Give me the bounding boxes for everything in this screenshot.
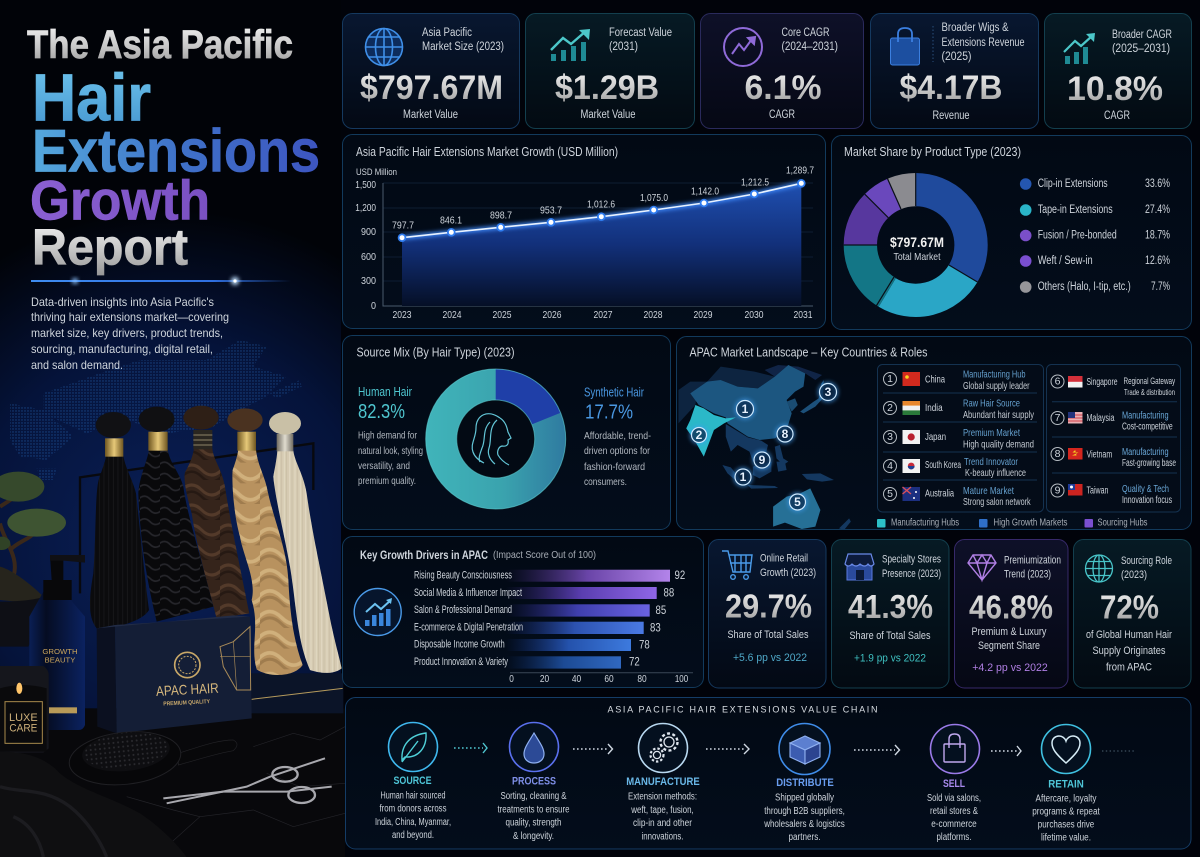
intro paragraph: market size, key drivers, product trends, (31, 326, 223, 340)
line area chart: 797.7 (392, 220, 414, 232)
step: manufacture: weft, tape, fusion, (630, 805, 694, 816)
panel: specialty stores presence: 41.3% (848, 588, 933, 625)
donut legend: Others (Halo, I-tip, etc.) (1038, 281, 1131, 293)
horizontal bar chart: Product Innovation & Variety (414, 656, 508, 668)
map legend: Sourcing Hubs (1098, 518, 1148, 528)
panel: value chain (346, 698, 1191, 849)
panel: KPI market size: $797.67M (360, 69, 503, 107)
human hair text (358, 385, 423, 487)
bottle: Growth Beauty (29, 555, 85, 730)
panel: sourcing role: from APAC (1106, 662, 1152, 674)
line area chart: 2028 (644, 309, 663, 321)
panel: KPI core CAGR: Core CAGR (782, 27, 830, 39)
country list right: 9 (1055, 484, 1061, 496)
icon: growth chart in ring (354, 588, 401, 636)
title (27, 23, 320, 276)
country list left: Australia (925, 488, 954, 500)
arrow: process to manufacture (573, 744, 612, 754)
horizontal bar chart: 88 (664, 588, 674, 600)
intro paragraph: thriving hair extensions market—covering (31, 310, 229, 324)
panel: specialty stores presence: Presence (2023) (882, 568, 941, 580)
intro paragraph: and salon demand. (31, 358, 123, 372)
step: sell: Sold via salons, (927, 793, 981, 804)
panel: sourcing role: (2023) (1121, 569, 1147, 581)
line area chart: 846.1 (440, 214, 462, 226)
panel: KPI broader CAGR: Broader CAGR (1112, 29, 1172, 41)
step: process: quality, strength (506, 818, 562, 828)
panel: left hero column (0, 0, 345, 857)
step: sell: SELL (943, 778, 965, 790)
candle: Luxe Care (0, 666, 49, 753)
country list left (878, 364, 1044, 512)
horizontal bar chart: 40 (572, 674, 582, 685)
step: sell: e-commerce (931, 819, 977, 830)
country list left: Mature Market (963, 485, 1014, 497)
product photo illustration (0, 340, 345, 857)
panel: KPI market size: Asia Pacific (422, 27, 472, 39)
panel: KPI broader revenue: Revenue (932, 110, 970, 122)
panel: sourcing role: Supply Originates (1092, 645, 1166, 657)
candle: Luxe Care: CARE (9, 723, 38, 735)
panel: premiumization trend: +4.2 pp vs 2022 (972, 662, 1048, 674)
title: Extensions (32, 118, 320, 184)
hair bundle: platinum straight (269, 412, 342, 673)
drivers heading: (Impact Score Out of 100) (493, 549, 596, 561)
panel: sourcing role: 72% (1100, 588, 1159, 626)
panel: sourcing role: Sourcing Role (1121, 555, 1172, 567)
line area chart: 1,289.7 (786, 164, 814, 176)
line area chart: 900 (361, 226, 376, 238)
step: sell: platforms. (936, 832, 972, 843)
candle: Luxe Care: LUXE (9, 712, 38, 724)
arrow: manufacture to distribute (706, 744, 749, 754)
synthetic hair text: 17.7% (585, 402, 633, 424)
synthetic hair text: fashion-forward (584, 461, 645, 473)
step: process (498, 722, 570, 842)
flag: India (902, 401, 920, 415)
horizontal bar chart: Salon & Professional Demand (414, 604, 512, 616)
panel: market growth chart (342, 134, 826, 328)
panel: KPI broader CAGR: (2025–2031) (1112, 43, 1170, 55)
donut legend: Fusion / Pre-bonded (1038, 230, 1117, 242)
country list left: 3 (887, 431, 893, 443)
horizontal bar chart: 20 (540, 674, 550, 685)
panel: key growth drivers (342, 536, 704, 688)
panel: sourcing role: of Global Human Hair (1086, 629, 1172, 641)
flag: Vietnam (1068, 448, 1082, 460)
icon: rising chart teal (551, 29, 590, 61)
panel: online retail growth (708, 540, 826, 688)
country list left: Trend Innovator (964, 456, 1018, 468)
icon: purple trend circle (724, 28, 762, 66)
step: distribute: partners. (788, 832, 820, 843)
horizontal bar chart: 100 (675, 674, 688, 685)
country list right (1046, 364, 1180, 512)
step: sell: retail stores & (930, 806, 978, 817)
country list right: Vietnam (1086, 450, 1112, 460)
intro paragraph: sourcing, manufacturing, digital retail, (31, 342, 213, 356)
step: process: Sorting, cleaning & (500, 791, 567, 802)
donut legend: Tape-in Extensions (1038, 204, 1113, 216)
line area chart: 2026 (542, 309, 562, 321)
panel: online retail growth: Online Retail (760, 552, 808, 564)
hair bundle: brown wavy (183, 406, 249, 618)
country list left: Premium Market (963, 427, 1020, 439)
horizontal bar chart: E-commerce & Digital Penetration (414, 622, 523, 634)
panel: KPI forecast value (526, 14, 694, 128)
panel: KPI forecast value: $1.29B (555, 69, 659, 107)
synthetic hair text (584, 386, 651, 488)
country list right: Manufacturing (1122, 410, 1169, 422)
icon: water drop (524, 733, 544, 763)
country list right: 8 (1055, 448, 1061, 460)
black cloth (0, 752, 187, 857)
step: source: India, China, Myanmar, (375, 817, 451, 828)
donut chart: Total Market (894, 251, 941, 263)
panel: KPI forecast value: Forecast Value (609, 27, 672, 39)
step: source: from donors across (380, 804, 446, 814)
country list left: 4 (887, 460, 893, 472)
line area chart: 2031 (794, 309, 813, 321)
step: sell (927, 724, 981, 843)
country list left: High quality demand (963, 438, 1034, 450)
line area chart: 300 (361, 275, 376, 287)
country list right: Trade & distribution (1124, 387, 1175, 397)
step: manufacture: innovations. (642, 832, 684, 842)
title: Report (32, 218, 188, 276)
horizontal bar chart: Social Media & Influencer Impact (414, 587, 522, 599)
icon: parcel box (790, 736, 820, 764)
horizontal bar chart: Rising Beauty Consciousness (414, 570, 512, 582)
horizontal bar chart: 92 (674, 570, 685, 582)
country list left: India (925, 402, 943, 414)
dotted Asia map backdrop (10, 340, 302, 480)
donut legend: 7.7% (1151, 281, 1170, 293)
panel: premiumization trend: 46.8% (969, 588, 1053, 626)
horizontal bar chart: Disposable Income Growth (414, 638, 505, 650)
step: retain: lifetime value. (1041, 832, 1091, 844)
country list right: Malaysia (1086, 413, 1115, 424)
bonsai tree (0, 472, 66, 647)
line area chart: 953.7 (540, 204, 562, 216)
line area chart: 2030 (744, 309, 764, 321)
panel: online retail growth: Share of Total Sales (728, 629, 809, 641)
bottle: Growth Beauty: BEAUTY (45, 655, 75, 664)
icon: shopping cart (722, 551, 752, 579)
panel: KPI market size (342, 14, 520, 128)
panel: KPI broader CAGR: 10.8% (1067, 70, 1163, 108)
human hair text: 82.3% (358, 401, 405, 423)
step: manufacture: clip-in and other (633, 818, 693, 829)
panel: premiumization trend (954, 540, 1068, 688)
line area chart: 2027 (594, 309, 613, 321)
panel: KPI broader revenue: $4.17B (900, 69, 1002, 107)
country list right: Regional Gateway (1124, 376, 1175, 387)
arrow: source to process (454, 743, 487, 753)
flag: Singapore (1068, 376, 1082, 388)
panel: KPI broader revenue: Broader Wigs & (942, 22, 1009, 34)
human hair text: natural look, styling (358, 445, 423, 457)
line area chart (355, 164, 814, 321)
country list right: 7 (1055, 412, 1061, 424)
panel: source mix (342, 336, 670, 530)
intro paragraph (31, 295, 229, 372)
line area chart: 0 (371, 300, 376, 312)
country list left: Global supply leader (963, 380, 1030, 392)
panel: market growth chart: USD Million (356, 167, 397, 178)
gift box: APAC Hair: APAC HAIR (156, 680, 219, 699)
country list left: Manufacturing Hub (963, 368, 1026, 380)
map title: APAC Market Landscape – Key Countries & Roles (690, 346, 928, 360)
intro paragraph: Data-driven insights into Asia Pacific's (31, 295, 214, 309)
country list left: China (925, 374, 945, 386)
title: The Asia Pacific (27, 23, 293, 67)
panel: online retail growth: 29.7% (725, 588, 812, 624)
step: distribute: wholesalers & logistics (763, 819, 845, 830)
country list left: Raw Hair Source (963, 398, 1020, 410)
step: source: and beyond. (392, 830, 434, 841)
map markers: 1 (740, 470, 747, 484)
panel: specialty stores presence (832, 540, 949, 688)
source mix title: Source Mix (By Hair Type) (2023) (356, 346, 514, 360)
panel: KPI broader CAGR: CAGR (1104, 110, 1130, 122)
horizontal bar chart (414, 570, 693, 685)
step: distribute (763, 724, 845, 843)
country list left: South Korea (925, 459, 961, 471)
country list right: Taiwan (1086, 486, 1108, 496)
flag: China (902, 372, 920, 386)
country list left: Strong salon network (963, 496, 1031, 508)
panel: online retail growth: Growth (2023) (760, 567, 816, 579)
map markers: 2 (696, 428, 703, 442)
donut legend: 12.6% (1145, 255, 1170, 267)
donut title: Market Share by Product Type (2023) (844, 145, 1021, 159)
flag: South Korea (902, 459, 920, 473)
gift box: APAC Hair: PREMIUM QUALITY (163, 699, 210, 708)
step: distribute: DISTRIBUTE (776, 777, 834, 789)
panel: specialty stores presence: Specialty Stores (882, 554, 941, 566)
value chain title: ASIA PACIFIC HAIR EXTENSIONS VALUE CHAIN (608, 704, 880, 714)
line area chart: 1,075.0 (640, 192, 668, 204)
icon: woman's head silhouette (472, 414, 511, 465)
line area chart: 2025 (492, 309, 512, 321)
human hair text: premium quality. (358, 475, 416, 487)
map legend (877, 518, 1148, 528)
panel: premiumization trend: Premium & Luxury (972, 626, 1047, 638)
step: distribute: through B2B suppliers, (764, 806, 845, 817)
icon: teal globe (1086, 555, 1112, 582)
country list left: K-beauty influence (965, 467, 1026, 479)
icon: leaf (402, 733, 426, 762)
display stand (80, 443, 313, 593)
horizontal bar chart: 72 (629, 657, 640, 669)
country list right: Cost-competitive (1122, 422, 1173, 432)
donut chart: $797.67M (890, 234, 944, 250)
panel: KPI market size: Market Size (2023) (422, 41, 504, 53)
map legend: Manufacturing Hubs (891, 518, 959, 528)
scissors (163, 758, 332, 803)
donut chart (837, 167, 994, 323)
line area chart: 1,012.6 (587, 198, 615, 210)
line area chart: 600 (361, 251, 376, 263)
panel: market share by product type (832, 136, 1192, 330)
country list left: Japan (925, 431, 946, 443)
map markers: 5 (794, 495, 801, 509)
synthetic hair text: consumers. (584, 476, 627, 488)
arrow: distribute to sell (854, 745, 900, 755)
icon: rising chart small (1064, 33, 1095, 64)
panel: premiumization trend: Trend (2023) (1004, 568, 1051, 580)
horizontal bar chart: 83 (650, 623, 661, 635)
panel: KPI core CAGR: CAGR (769, 109, 795, 121)
country list left: 2 (887, 402, 893, 414)
icon: gears (650, 734, 678, 762)
hair brush (67, 727, 237, 790)
flag: Australia (902, 487, 920, 501)
horizontal bar chart: 60 (604, 674, 614, 685)
panel: online retail growth: +5.6 pp vs 2022 (733, 652, 807, 664)
step: source (375, 722, 451, 841)
line area chart: 1,212.5 (741, 176, 769, 188)
source mix donut (426, 369, 566, 509)
step: manufacture (626, 724, 700, 842)
line area chart: 2029 (694, 309, 713, 321)
panel: specialty stores presence: +1.9 pp vs 2022 (854, 652, 926, 664)
panel: KPI broader revenue: Extensions Revenue (942, 37, 1024, 49)
donut legend: 27.4% (1145, 204, 1170, 216)
human hair text: versatility, and (358, 460, 410, 472)
step: process: PROCESS (512, 776, 556, 788)
hair bundle: honey blonde wavy (227, 408, 303, 675)
title divider with glowing nodes (31, 277, 291, 285)
icon: shopping bag outline (944, 734, 965, 762)
step: retain: programs & repeat (1032, 806, 1100, 818)
hair bundle: black curly (138, 407, 213, 622)
line area chart: 2023 (392, 309, 412, 321)
horizontal bar chart: 0 (509, 674, 514, 685)
panel: KPI core CAGR: (2024–2031) (782, 41, 838, 53)
icon: globe (366, 28, 402, 66)
map markers: 1 (742, 402, 749, 416)
marble table (0, 708, 345, 857)
bottle: Growth Beauty: GROWTH (42, 647, 78, 656)
drivers heading (360, 548, 596, 562)
panel: APAC market landscape (676, 336, 1192, 530)
panel: sourcing role (1074, 540, 1191, 688)
step: distribute: Shipped globally (775, 792, 834, 804)
step: process: & longevity. (513, 831, 554, 842)
synthetic hair text: Affordable, trend- (584, 430, 651, 442)
title: Hair (32, 60, 151, 136)
horizontal bar chart: 78 (639, 640, 650, 652)
country list left: 1 (887, 373, 893, 385)
panel: KPI broader revenue (870, 14, 1038, 128)
donut legend: Weft / Sew-in (1038, 255, 1093, 267)
donut legend: Clip-in Extensions (1038, 178, 1108, 190)
country list left: 5 (887, 488, 893, 500)
map markers: 3 (825, 385, 832, 399)
panel: KPI broader CAGR (1044, 14, 1192, 128)
map legend: High Growth Markets (994, 518, 1068, 528)
step: source: Human hair sourced (380, 790, 446, 802)
line area chart: 2024 (442, 309, 462, 321)
flag: Taiwan (1068, 484, 1082, 496)
line area chart: 1,200 (355, 202, 376, 214)
icon: diamond (968, 555, 996, 580)
map markers: 9 (759, 453, 766, 467)
icon: shopping bag (890, 28, 920, 65)
line area chart: 898.7 (490, 210, 512, 222)
country list right: Manufacturing (1122, 447, 1169, 458)
horizontal bar chart: 85 (656, 605, 666, 617)
panel: KPI market size: Market Value (403, 109, 458, 121)
gift box: APAC Hair (97, 615, 252, 733)
line area chart: 1,142.0 (691, 186, 719, 198)
step: manufacture: MANUFACTURE (626, 776, 700, 788)
human hair text: High demand for (358, 430, 417, 442)
drivers heading: Key Growth Drivers in APAC (360, 548, 488, 562)
map markers (692, 384, 836, 510)
donut legend: 33.6% (1145, 178, 1170, 190)
human hair text: Human Hair (358, 385, 412, 399)
synthetic hair text: driven options for (584, 445, 650, 457)
stand platform (250, 673, 343, 713)
line area chart: 1,500 (355, 179, 376, 191)
donut legend (1020, 178, 1170, 293)
country list right: Quality & Tech (1122, 484, 1169, 495)
panel: premiumization trend: Premiumization (1004, 554, 1061, 566)
hair bundle: black straight (90, 412, 149, 628)
step: retain: purchases drive (1038, 820, 1095, 830)
horizontal bar chart: 80 (637, 674, 647, 685)
icon: storefront (845, 554, 874, 580)
step: retain: Aftercare, loyalty (1036, 794, 1096, 804)
country list right: Innovation focus (1122, 495, 1172, 506)
panel: premiumization trend: Segment Share (978, 640, 1040, 652)
map of Asia Pacific (678, 365, 851, 530)
panel: KPI broader revenue: (2025) (942, 51, 972, 63)
country list left: Abundant hair supply (963, 409, 1035, 421)
panel: KPI forecast value: (2031) (609, 41, 638, 53)
country list right: 6 (1055, 376, 1061, 388)
flag: Japan (902, 430, 920, 444)
icon: heart (1052, 736, 1080, 763)
step: manufacture: Extension methods: (628, 792, 697, 802)
arrow: sell to retain (991, 746, 1021, 756)
flag: Malaysia (1068, 412, 1082, 424)
country list right: Singapore (1086, 377, 1118, 388)
donut legend: 18.7% (1145, 230, 1170, 242)
chart title: Asia Pacific Hair Extensions Market Growth (USD Million) (356, 145, 618, 159)
step: retain: RETAIN (1048, 778, 1084, 790)
panel: KPI core CAGR (700, 14, 864, 128)
panel: KPI forecast value: Market Value (580, 109, 636, 121)
title: Growth (30, 168, 210, 232)
panel: KPI core CAGR: 6.1% (744, 69, 822, 107)
step: process: treatments to ensure (498, 804, 570, 816)
step: retain (1032, 724, 1100, 844)
map markers: 8 (782, 427, 789, 441)
panel: specialty stores presence: Share of Total Sales (850, 630, 931, 642)
step: source: SOURCE (394, 775, 432, 787)
synthetic hair text: Synthetic Hair (584, 386, 644, 400)
